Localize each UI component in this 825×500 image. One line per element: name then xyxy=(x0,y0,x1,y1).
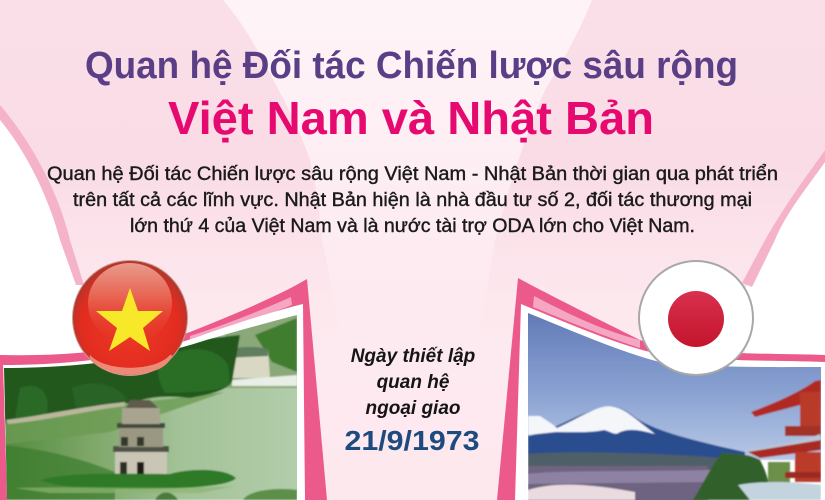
title xyxy=(85,45,738,144)
date callout xyxy=(344,346,480,456)
photo: Hoan Kiem lake and Turtle Tower xyxy=(0,300,300,500)
tower xyxy=(113,400,169,475)
intro paragraph: lớn thứ 4 của Việt Nam và là nước tài trợ ODA lớn cho Việt Nam. xyxy=(130,215,695,237)
right white corner with pink ribbon xyxy=(742,150,825,357)
date: 21/9/1973 xyxy=(344,425,480,456)
subtitle: Việt Nam và Nhật Bản xyxy=(168,92,654,144)
intro paragraph: Quan hệ Đối tác Chiến lược sâu rộng Việt Nam - Nhật Bản thời gian qua phát triển xyxy=(47,163,778,185)
island xyxy=(40,470,236,489)
date callout: quan hệ xyxy=(377,372,450,393)
pagoda xyxy=(738,380,821,500)
panel: Vietnam photo frame xyxy=(0,279,327,500)
panel: Japan photo frame xyxy=(497,278,825,500)
left white corner with pink ribbon xyxy=(0,105,85,358)
town xyxy=(528,466,708,500)
date callout: ngoại giao xyxy=(366,398,460,419)
intro paragraph xyxy=(47,163,778,237)
intro paragraph: trên tất cả các lĩnh vực. Nhật Bản hiện là nhà đầu tư số 2, đối tác thương mại xyxy=(73,189,752,211)
Japan flag icon xyxy=(638,260,754,376)
trees xyxy=(693,452,770,500)
mountain xyxy=(528,406,746,459)
Vietnam flag icon xyxy=(72,260,188,376)
photo: Mount Fuji and pagoda xyxy=(525,310,825,500)
title: Quan hệ Đối tác Chiến lược sâu rộng xyxy=(85,45,738,87)
date callout: Ngày thiết lập xyxy=(351,346,475,367)
